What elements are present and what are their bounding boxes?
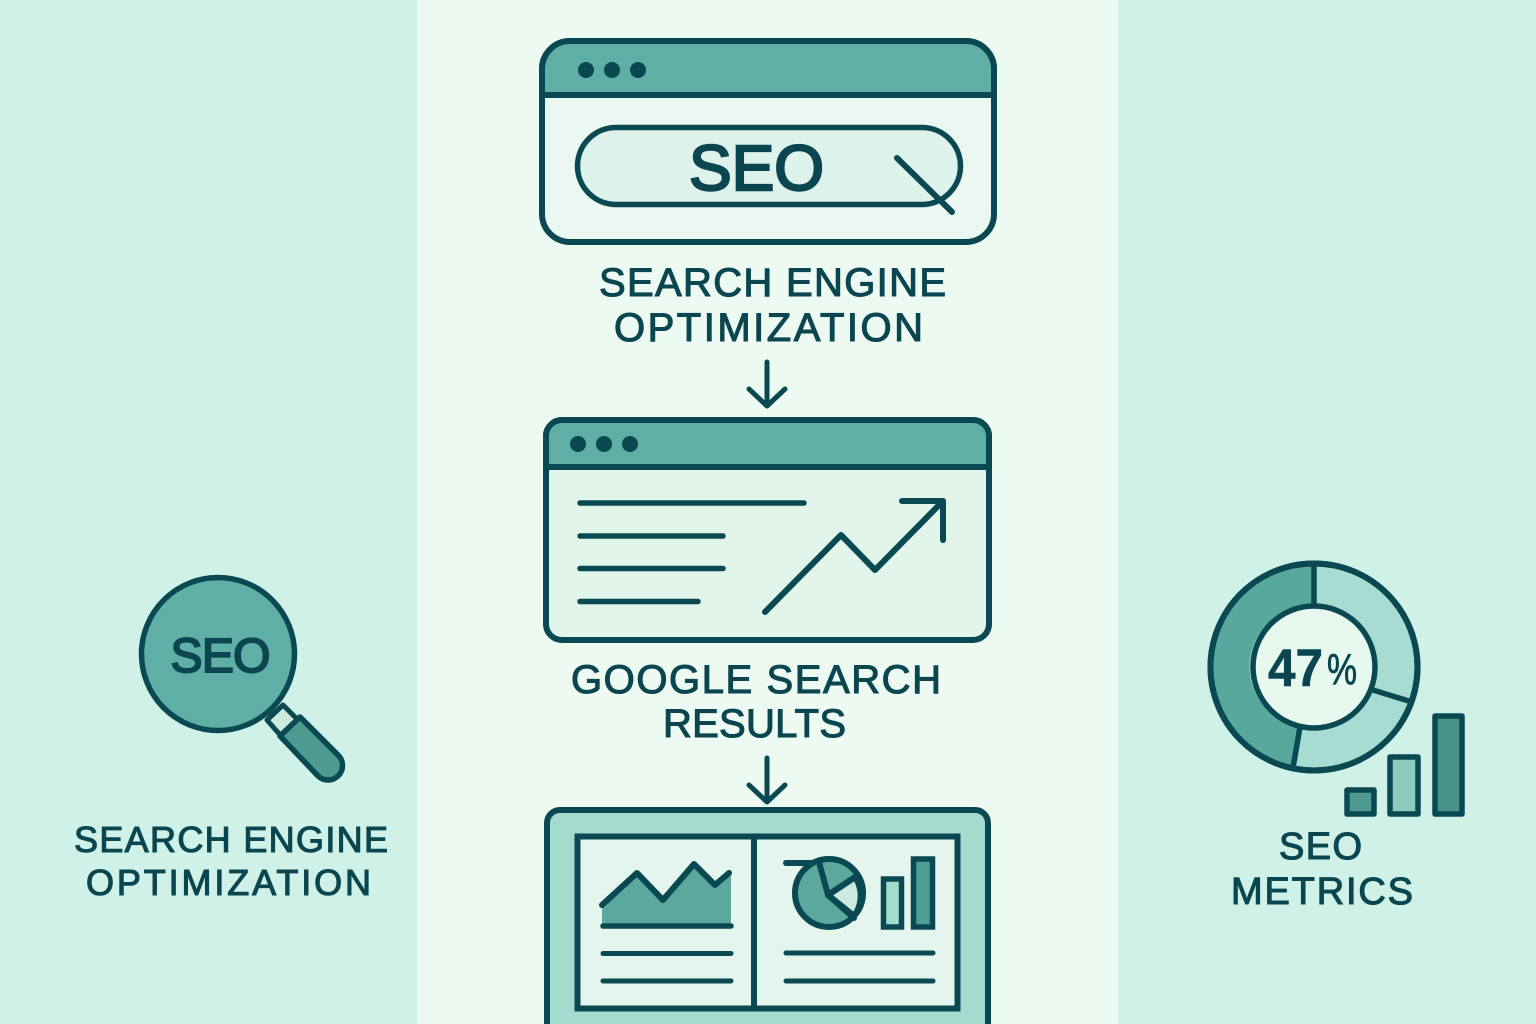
label: search engine optimization (left): OPTIMIZATION — [86, 862, 371, 903]
icon: browser window with search results and growth chart — [546, 420, 989, 640]
heading: google search results: GOOGLE SEARCH — [571, 658, 941, 702]
lens text: SEO — [170, 630, 270, 683]
heading: search engine optimization (center): SEARCH ENGINE — [599, 261, 946, 305]
label: SEO metrics: SEO — [1279, 826, 1362, 868]
right panel text lines — [786, 953, 933, 981]
donut value: 47 — [1268, 639, 1323, 698]
magnifier lens — [142, 578, 294, 730]
area chart — [602, 864, 731, 926]
donut value — [1268, 639, 1357, 698]
donut value: % — [1327, 645, 1357, 694]
icon: magnifying glass with SEO — [142, 578, 342, 780]
results header bar — [546, 420, 989, 467]
tall bar — [1435, 716, 1462, 814]
donut center — [1253, 606, 1375, 728]
magnifier neck — [267, 705, 298, 736]
screen divider — [751, 836, 757, 1010]
donut base ring, light segments — [1210, 564, 1418, 770]
panel: right background — [1118, 0, 1536, 1024]
results browser body — [546, 420, 989, 640]
browser header bar — [542, 41, 994, 95]
donut outer outline — [1210, 564, 1418, 770]
label: SEO metrics: METRICS — [1231, 871, 1413, 913]
panel: left background — [0, 0, 417, 1024]
label: search engine optimization (left): SEARCH ENGINE — [74, 819, 388, 860]
left panel text lines — [603, 954, 731, 981]
search pill — [578, 128, 960, 204]
heading: search engine optimization (center) — [599, 261, 946, 350]
mini bar chart — [884, 859, 932, 927]
donut dark segment — [1213, 566, 1314, 766]
pie chart — [786, 859, 863, 927]
result lines — [580, 503, 804, 602]
search text: SEO — [689, 132, 824, 204]
chart: donut with 47 percent — [1210, 564, 1418, 770]
donut dividers — [1293, 566, 1412, 768]
panel: center background — [417, 0, 1118, 1024]
chart: ascending bars — [1347, 716, 1462, 814]
results header dots — [570, 436, 638, 452]
small bar — [1347, 790, 1374, 814]
medium bar — [1390, 757, 1418, 814]
icon: browser window with SEO search bar — [542, 41, 994, 242]
browser body — [542, 41, 994, 242]
dashboard screen — [578, 836, 958, 1008]
heading: google search results: RESULTS — [663, 702, 846, 746]
heading: google search results — [571, 658, 941, 746]
dashboard monitor frame — [547, 810, 988, 1024]
heading: search engine optimization (center): OPTIMIZATION — [614, 306, 923, 350]
icon: analytics dashboard — [547, 810, 988, 1024]
label: SEO metrics — [1231, 826, 1413, 913]
arrow: down to dashboard — [749, 758, 785, 802]
arrow: down to search results — [749, 362, 785, 406]
header dots — [578, 62, 646, 78]
search handle — [897, 158, 952, 212]
magnifier handle — [280, 717, 342, 780]
label: search engine optimization (left) — [74, 819, 388, 903]
growth arrow — [765, 501, 943, 612]
